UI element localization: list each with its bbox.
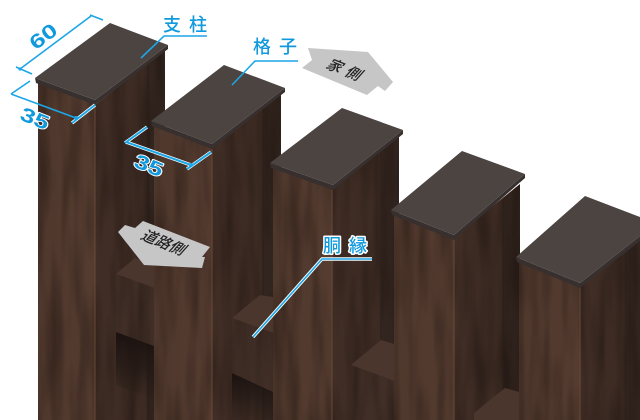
rail 4 bbox=[474, 388, 519, 420]
arrow: 家側 bbox=[302, 48, 393, 95]
rail 1 bbox=[116, 258, 154, 400]
post 2 (格子) bbox=[151, 65, 285, 420]
dimension: 35 post bbox=[11, 81, 95, 134]
label: 胴縁 bbox=[253, 236, 375, 337]
dimension: 35 post: 35 bbox=[17, 103, 53, 134]
label: 胴縁: 胴縁 bbox=[323, 236, 375, 256]
label: 格子: 格子 bbox=[253, 37, 305, 57]
arrow: 道路側 bbox=[118, 221, 210, 268]
dimension: 35 slat bbox=[125, 127, 211, 181]
post 4 bbox=[391, 151, 525, 420]
label: 格子 bbox=[232, 37, 305, 85]
arrow: 家側: 家側 bbox=[322, 57, 372, 86]
dimension: 60 bbox=[16, 15, 103, 74]
rail 2 bbox=[232, 295, 273, 420]
dimension: 60: 60 bbox=[25, 19, 62, 54]
label: 支柱: 支柱 bbox=[163, 15, 215, 35]
label: 支柱 bbox=[141, 15, 215, 58]
rail 3 bbox=[351, 340, 394, 420]
post 3 bbox=[270, 108, 403, 420]
post 5 bbox=[516, 196, 640, 420]
arrow: 道路側: 道路側 bbox=[137, 228, 191, 258]
dimension: 35 slat: 35 bbox=[131, 150, 167, 181]
post 1 (支柱) bbox=[35, 23, 168, 420]
